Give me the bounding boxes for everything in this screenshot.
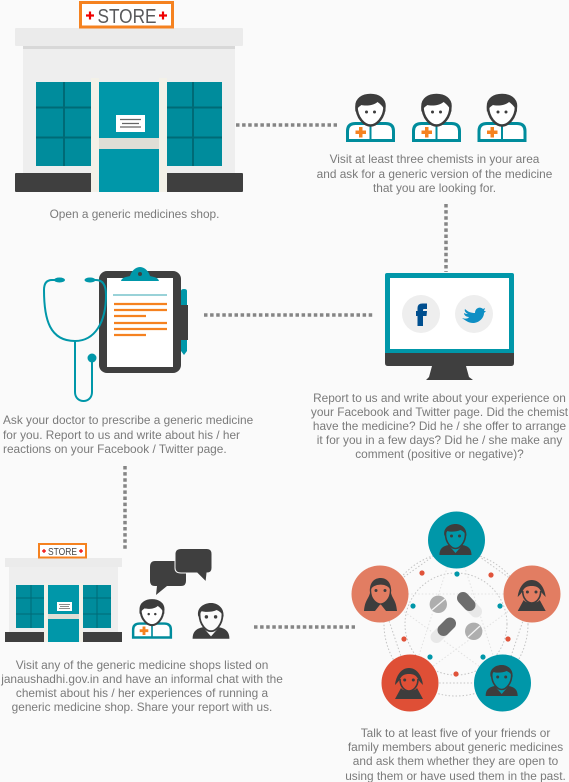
connector: monitor to clipboard [204, 313, 374, 317]
friend: bottom right [474, 654, 531, 712]
nodes: small connecting dots [401, 570, 511, 677]
text: ask your doctor: reactions on your Facebook / Twitter page. [3, 442, 227, 456]
icon: chemist and friend chatting [133, 600, 229, 639]
friend: top [428, 512, 485, 568]
icon: computer monitor with social media [385, 273, 514, 380]
text: ask your doctor: Ask your doctor to prescribe a generic medicine [3, 413, 253, 427]
diagram: friends network around pills [352, 512, 560, 712]
connector: doctor to small store [123, 466, 127, 550]
icon: three chemists [348, 94, 525, 141]
text: report on experience: it for you in a few days? Did he / she make any [317, 433, 562, 447]
icon: small store [5, 544, 122, 642]
icon: small store: STORE [48, 547, 77, 558]
friend: left [352, 566, 408, 622]
friend: bottom left [382, 654, 438, 712]
icon: large store [15, 2, 243, 192]
text: visit generic medicine shops: Visit any of the generic medicine shops listed on [16, 658, 268, 672]
text: talk to friends: Talk to at least five of your friends or [361, 726, 550, 740]
text: visit generic medicine shops: generic medicine shop. Share your report with us. [12, 700, 272, 714]
text: visit generic medicine shops: janaushadhi.gov.in and have an informal chat with the [1, 672, 283, 686]
text: report on experience [311, 391, 568, 461]
connector: chemists to monitor [444, 204, 448, 272]
text: visit generic medicine shops [0, 658, 283, 714]
connector: store to chemists [236, 123, 337, 127]
text: report on experience: Report to us and write about your experience on [313, 391, 566, 405]
friend: right [504, 566, 560, 622]
icon: speech bubbles [150, 548, 212, 595]
text: talk to friends: and ask them whether they are open to [353, 754, 558, 768]
text: talk to friends [345, 726, 566, 782]
text: ask your doctor: for you. Report to us and write about his / her [3, 428, 240, 442]
text: report on experience: comment (positive or negative)? [355, 447, 524, 461]
icon: large store: STORE [98, 6, 156, 28]
text: visit generic medicine shops: chemist about his / her experiences of running a [16, 686, 268, 700]
text: open a shop: Open a generic medicines shop. [50, 207, 219, 221]
icon: pills [430, 596, 482, 640]
text: visit three chemists: Visit at least three chemists in your area [330, 152, 539, 166]
text: visit three chemists [317, 152, 552, 195]
text: visit three chemists: that you are looking for. [373, 181, 496, 195]
text: talk to friends: family members about generic medicines [348, 740, 563, 754]
text: report on experience: have the medicine? Did he / she offer to arrange [313, 419, 566, 433]
text: ask your doctor [3, 413, 253, 456]
icon: clipboard and stethoscope [44, 267, 188, 401]
text: report on experience: your Facebook and Twitter page. Did the chemist [311, 405, 568, 419]
connector: small store to friends [254, 625, 355, 629]
text: visit three chemists: and ask for a generic version of the medicine [317, 166, 552, 180]
